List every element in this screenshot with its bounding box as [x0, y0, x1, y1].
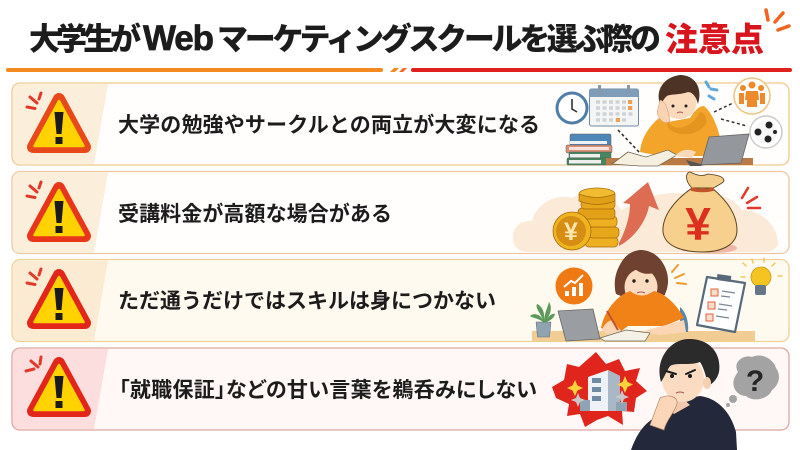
calendar	[590, 85, 638, 126]
laptop	[558, 309, 600, 341]
text 4: 「就職保証」などの甘い言葉を鵜呑みにしない	[119, 374, 537, 404]
warning icon 1	[27, 93, 85, 147]
light bulb	[741, 258, 782, 295]
up arrow	[619, 182, 659, 246]
soccer ball	[750, 116, 782, 148]
title divider	[6, 68, 792, 72]
thought bubble	[726, 355, 779, 407]
open book	[612, 150, 677, 166]
warning icon 4	[26, 357, 85, 411]
plant	[530, 302, 555, 337]
panel 3: skills not automatic	[12, 250, 789, 342]
thinking man	[631, 339, 737, 450]
panel 4: sweet job promises	[12, 339, 789, 450]
illustration: student juggling study and activities	[557, 75, 782, 166]
red emphasis	[742, 188, 760, 208]
title: Web	[143, 19, 214, 58]
desk	[532, 331, 755, 341]
panel 2: high tuition	[12, 172, 789, 254]
yen coin: ¥	[564, 218, 578, 246]
title: マーケティングスクールを選ぶ際の	[217, 14, 661, 59]
title	[29, 13, 764, 61]
warning icon 3	[27, 269, 85, 323]
illustration: coins and money bag	[513, 172, 778, 253]
pale cloud	[513, 193, 778, 252]
chart icon	[556, 268, 592, 304]
panel 1: balancing studies	[12, 75, 789, 166]
money bag	[663, 172, 737, 253]
red burst with building	[552, 352, 647, 427]
laptop	[686, 134, 749, 166]
woman	[601, 250, 688, 335]
sweat marks	[706, 82, 717, 99]
books	[566, 134, 612, 165]
text 2: 受講料金が高額な場合がある	[118, 198, 392, 228]
clipboard	[697, 274, 745, 332]
icon: title emphasis marks	[766, 10, 789, 30]
clock	[557, 93, 587, 123]
people icon	[734, 78, 770, 114]
student	[606, 75, 753, 165]
text 1: 大学の勉強やサークルとの両立が大変になる	[118, 109, 540, 139]
yen coin	[553, 212, 591, 250]
warning icon 2	[27, 182, 85, 236]
illustration: woman studying with checklist	[530, 250, 782, 341]
title: 注意点	[665, 13, 764, 61]
money bag: ¥	[685, 198, 711, 250]
thought bubble: ?	[746, 365, 764, 398]
text 3: ただ通うだけではスキルは身につかない	[118, 285, 496, 315]
illustration: burst building and doubtful man	[552, 339, 779, 450]
open notebook	[600, 330, 650, 341]
title: 大学生が	[29, 14, 141, 59]
orange marks	[672, 265, 686, 284]
coin stack	[578, 188, 619, 247]
